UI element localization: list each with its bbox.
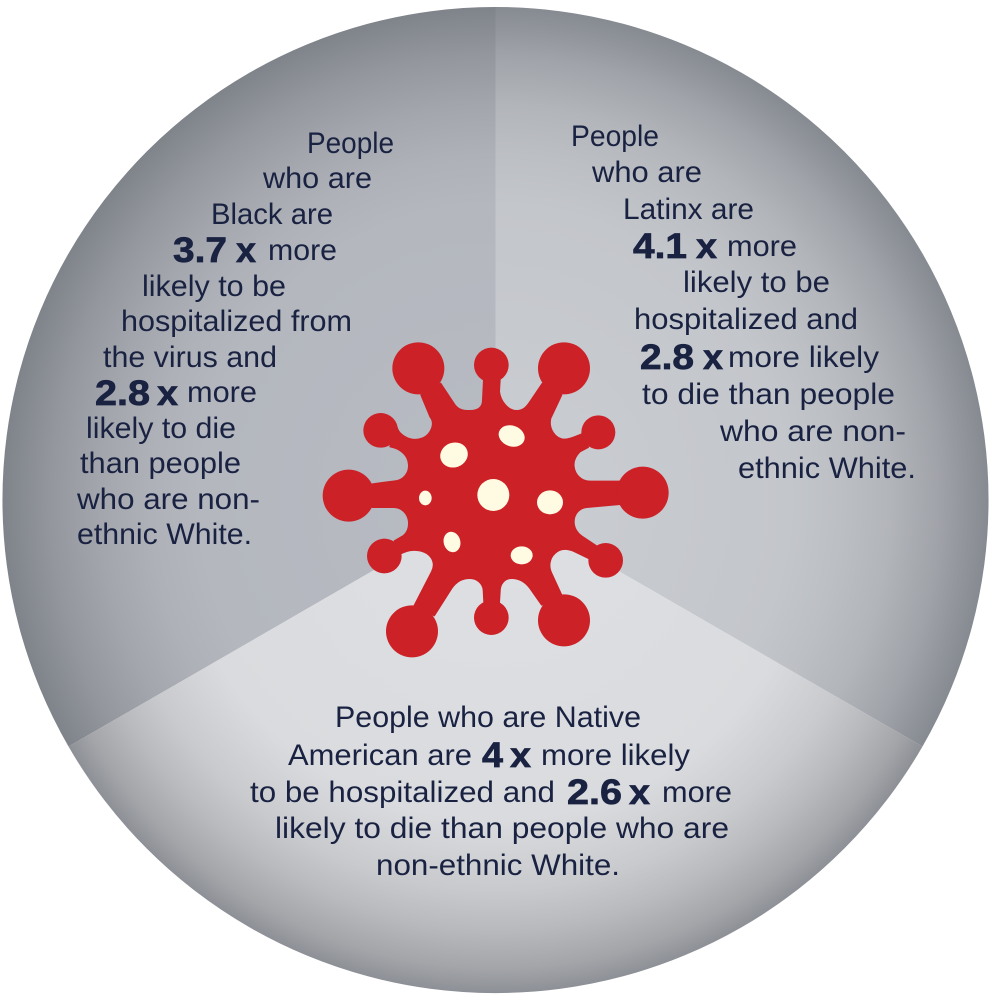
text block: Latinx statistics: more bbox=[727, 230, 797, 263]
icon: red virus bbox=[323, 342, 669, 657]
text block: Native American statistics: American are bbox=[288, 739, 472, 772]
text block: Latinx statistics: 2.8 bbox=[640, 338, 694, 377]
text block: Native American statistics: likely to die than people who are bbox=[275, 812, 729, 845]
text block: Latinx statistics bbox=[571, 120, 916, 485]
text block: Black statistics: than people bbox=[80, 447, 241, 480]
text block: Black statistics: ethnic White. bbox=[77, 518, 252, 551]
text block: Latinx statistics: x bbox=[696, 227, 718, 266]
text block: Latinx statistics: likely to be bbox=[683, 266, 830, 299]
panel: Latinx sector bbox=[496, 7, 989, 746]
text block: Native American statistics: x bbox=[510, 736, 532, 775]
text block: Black statistics: Black are bbox=[211, 198, 333, 231]
text block: Black statistics: x bbox=[157, 374, 179, 413]
text block: Black statistics: People bbox=[307, 127, 394, 160]
text block: Native American statistics: non-ethnic White. bbox=[376, 849, 620, 882]
panel: Native American sector bbox=[68, 500, 922, 993]
text block: Latinx statistics: 4.1 bbox=[633, 227, 687, 266]
text block: Black statistics: 2.8 bbox=[95, 374, 150, 413]
text block: Native American statistics: more bbox=[662, 776, 732, 809]
panel: Black sector bbox=[2, 7, 495, 746]
text block: Latinx statistics: People bbox=[571, 120, 659, 153]
text block: Native American statistics: 2.6 bbox=[567, 773, 622, 812]
text block: Black statistics: more bbox=[187, 376, 257, 409]
text block: Latinx statistics: Latinx are bbox=[623, 193, 754, 226]
text block: Native American statistics: x bbox=[629, 773, 651, 812]
text block: Native American statistics: People who are Native bbox=[335, 701, 641, 734]
text block: Black statistics: 3.7 bbox=[173, 231, 227, 270]
text block: Black statistics: hospitalized from bbox=[121, 305, 352, 338]
text block: Black statistics: who are bbox=[262, 162, 372, 195]
text block: Black statistics: likely to die bbox=[86, 412, 236, 445]
text block: Latinx statistics: ethnic White. bbox=[738, 452, 916, 485]
text block: Native American statistics: 4 bbox=[482, 736, 504, 775]
text block: Native American statistics: to be hospitalized and bbox=[250, 776, 555, 809]
text block: Latinx statistics: x bbox=[703, 338, 724, 377]
text block: Latinx statistics: who are bbox=[591, 156, 702, 189]
text block: Native American statistics bbox=[250, 701, 732, 882]
virus body with spikes bbox=[323, 342, 669, 657]
text block: Native American statistics: more likely bbox=[541, 739, 690, 772]
text block: Black statistics: who are non- bbox=[76, 483, 260, 516]
text block: Latinx statistics: hospitalized and bbox=[634, 303, 858, 336]
text block: Black statistics bbox=[76, 127, 394, 551]
text block: Latinx statistics: who are non- bbox=[719, 415, 906, 448]
text block: Black statistics: more bbox=[268, 234, 337, 267]
text block: Latinx statistics: to die than people bbox=[642, 378, 895, 411]
text block: Black statistics: likely to be bbox=[142, 270, 286, 303]
text block: Latinx statistics: more likely bbox=[728, 341, 879, 374]
virus spots bbox=[419, 422, 563, 564]
text block: Black statistics: x bbox=[236, 231, 257, 270]
text block: Black statistics: the virus and bbox=[103, 341, 277, 374]
